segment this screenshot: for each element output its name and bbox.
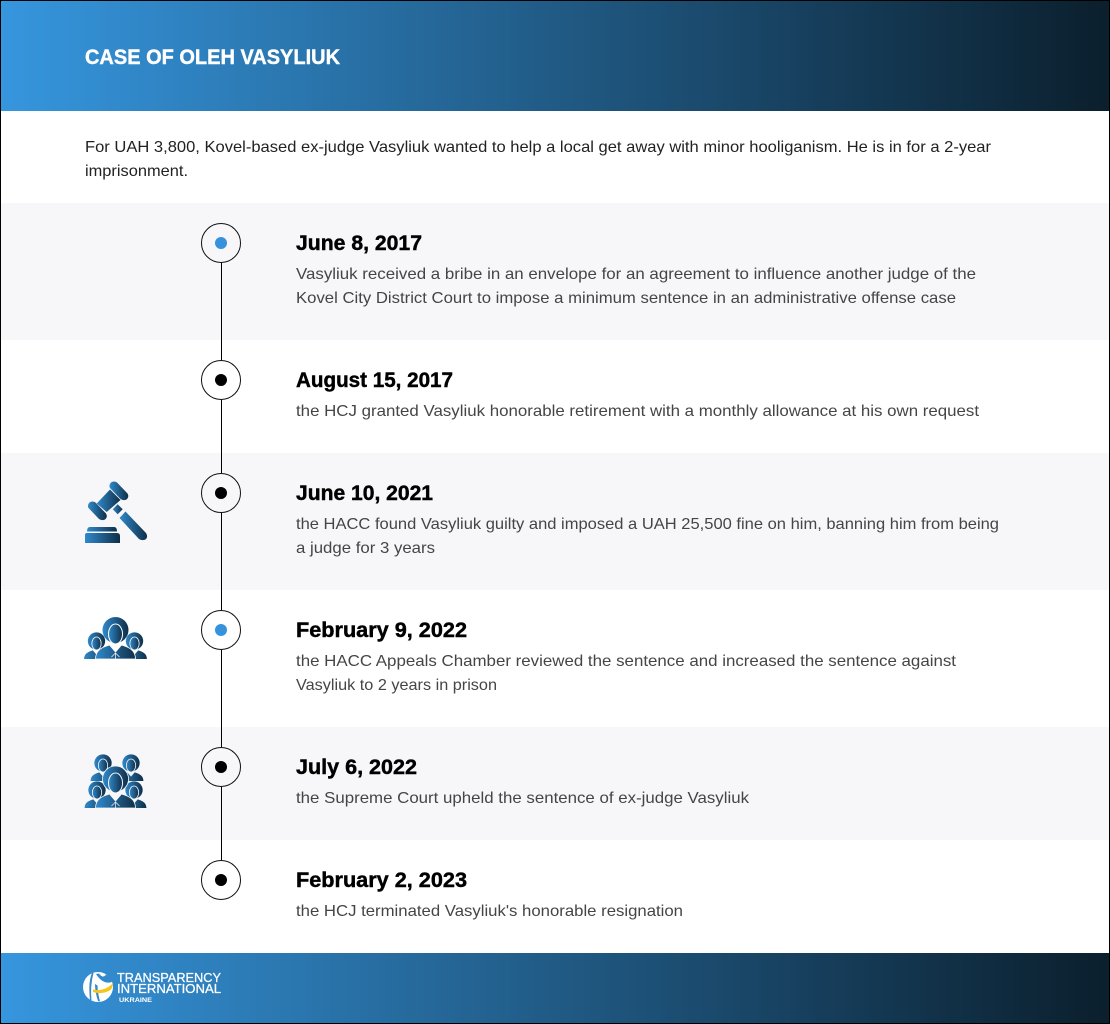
description: July 6, 2022: the Supreme Court upheld the sentence of ex-judge Vasyliuk [296,790,749,807]
description: February 9, 2022: the HACC Appeals Chamber reviewed the sentence and increased the sentence against [296,653,957,670]
date: June 10, 2021: June 10, 2021 [296,482,433,505]
icon: five judges [85,754,146,808]
node: February 9, 2022 [202,610,240,650]
footer banner [0,953,1110,1024]
logo: Transparency International Ukraine: UKRAINE [119,998,152,1004]
description: June 10, 2021 [296,516,999,557]
date: August 15, 2017: August 15, 2017 [296,369,453,392]
panel: June 8, 2017 [0,203,1110,340]
description: June 10, 2021: the HACC found Vasyliuk guilty and imposed a UAH 25,500 fine on him, banning him from being [296,516,999,533]
description: August 15, 2017: the HCJ granted Vasyliuk honorable retirement with a monthly allowance at his own request [296,403,980,420]
logo: Transparency International Ukraine [83,970,221,1004]
description: June 8, 2017: Vasyliuk received a bribe in an envelope for an agreement to influence another judge of the [296,266,976,283]
header banner [0,0,1110,111]
description: February 9, 2022 [296,653,957,694]
node: July 6, 2022 [202,748,240,786]
date: February 9, 2022: February 9, 2022 [296,619,467,642]
node: June 8, 2017 [202,224,240,262]
panel: February 2, 2023 [0,840,1110,953]
intro text: imprisonment. [85,163,188,180]
panel: June 10, 2021 [0,453,1110,590]
date: February 2, 2023: February 2, 2023 [296,869,467,892]
description: June 10, 2021: a judge for 3 years [296,540,435,557]
description: February 9, 2022: Vasyliuk to 2 years in prison [296,677,497,694]
logo: Transparency International Ukraine: TRANSPARENCY [117,970,221,985]
panel: August 15, 2017 [0,340,1110,453]
intro text: For UAH 3,800, Kovel-based ex-judge Vasyliuk wanted to help a local get away with minor hooliganism. He is in for a 2-year [85,139,991,156]
panel: July 6, 2022 [0,727,1110,840]
description: February 2, 2023: the HCJ terminated Vasyliuk's honorable resignation [296,903,683,920]
node: February 2, 2023 [202,860,240,900]
date: July 6, 2022: July 6, 2022 [296,756,417,779]
logo emblem [83,972,113,1002]
node: August 15, 2017 [202,360,240,400]
intro text [85,139,991,180]
panel: February 9, 2022 [0,590,1110,727]
node: June 10, 2021 [202,474,240,512]
date: June 8, 2017: June 8, 2017 [296,232,422,255]
description: June 8, 2017 [296,266,976,307]
timeline [202,224,240,900]
description: June 8, 2017: Kovel City District Court to impose a minimum sentence in an administrative offense case [296,290,956,307]
icon: gavel [85,482,147,543]
title: CASE OF OLEH VASYLIUK [85,46,340,69]
icon: three judges [84,617,147,659]
logo: Transparency International Ukraine: INTERNATIONAL [117,981,221,996]
